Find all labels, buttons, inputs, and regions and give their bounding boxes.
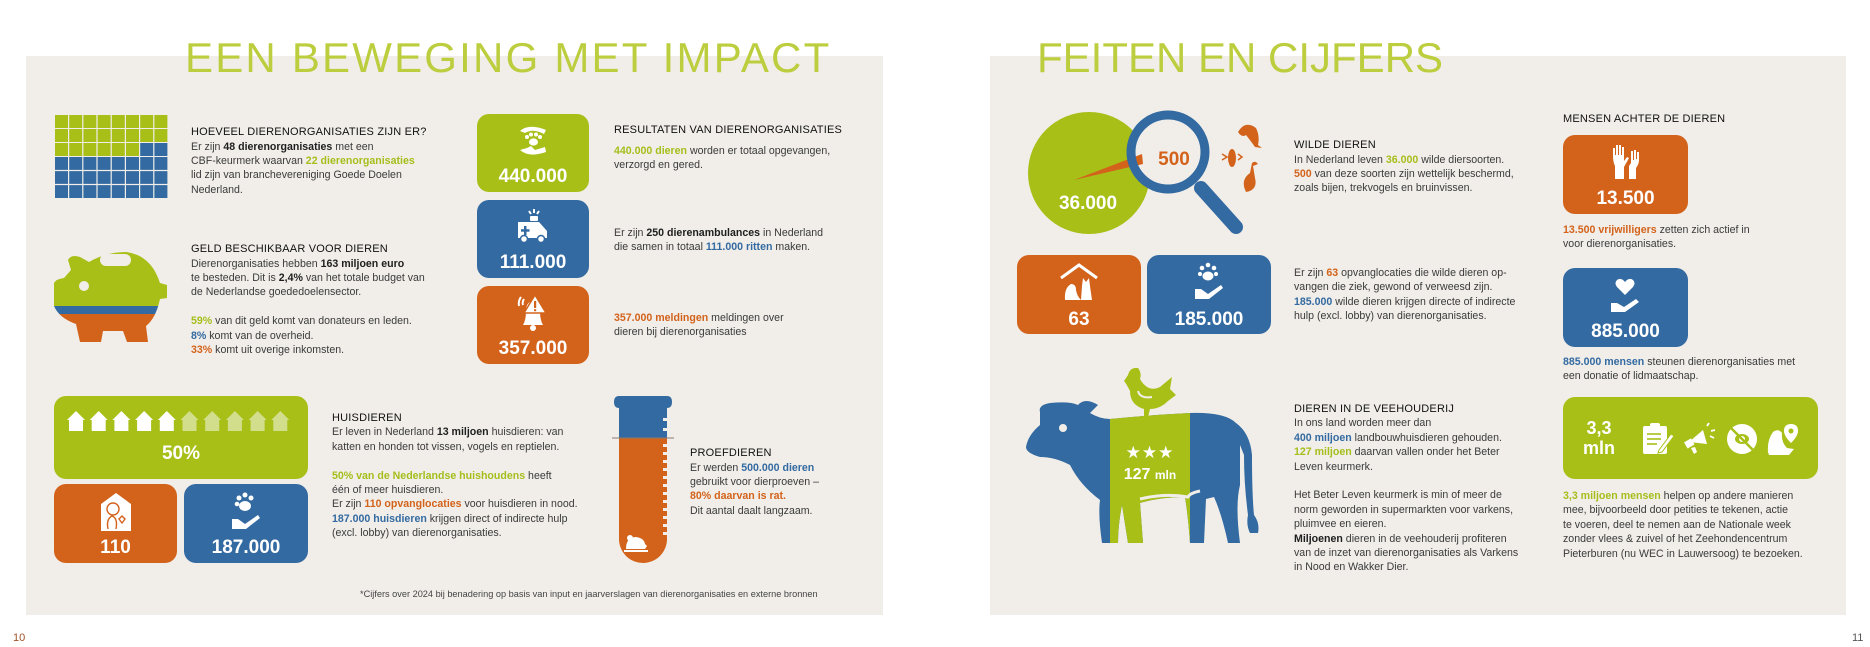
- box: 111.000 ambulances: 111.000: [500, 252, 566, 273]
- box: 3,3 mln mensen: [1563, 397, 1818, 479]
- box: 13.500 vrijwilligers: 13.500: [1596, 188, 1655, 209]
- text: In Nederland leven 36.000 wilde diersoorten.: [1294, 154, 1504, 166]
- text: lid zijn van branchevereniging Goede Doelen: [191, 169, 402, 181]
- box: 110 opvanglocaties: [54, 484, 177, 563]
- waffle chart: organisations: [55, 115, 168, 198]
- page number: 10: 10: [13, 632, 25, 644]
- text: 50% van de Nederlandse huishoudens heeft: [332, 470, 552, 482]
- text: opvang wilde dieren: vangen die ziek, gewond of verweesd zijn.: [1294, 281, 1492, 293]
- text: zoals bijen, trekvogels en bruinvissen.: [1294, 182, 1472, 194]
- number 3,3 mln: 3,3: [1586, 418, 1612, 438]
- text: 127 miljoen daarvan vallen onder het Beter: [1294, 446, 1500, 458]
- text: gebruikt voor dierproeven –: [690, 476, 819, 488]
- heading: mensen achter de dieren: MENSEN ACHTER DE DIEREN: [1563, 113, 1725, 125]
- icon: raised hands: [1613, 145, 1639, 179]
- text: 357.000 meldingen meldingen over: [614, 312, 784, 324]
- text: In ons land worden meer dan: [1294, 417, 1431, 429]
- box: 357.000 meldingen: [477, 286, 589, 364]
- box: 185.000 wilde dieren: 185.000: [1175, 309, 1243, 330]
- text: opvang wilde dieren: Er zijn 63 opvanglocaties die wilde dieren op-: [1294, 267, 1507, 279]
- text: proefdieren: [690, 447, 819, 517]
- text: PROEFDIEREN: [690, 447, 772, 459]
- text: donateurs: 885.000 mensen steunen dierenorganisaties met: [1563, 356, 1795, 368]
- text: te besteden. Dit is 2,4% van het totale budget van: [191, 272, 425, 284]
- text: dieren bij dierenorganisaties: [614, 326, 747, 338]
- icon: cow with chicken: [1026, 368, 1258, 543]
- chart: wild species magnifier: 500: [1158, 149, 1190, 170]
- text: van de inzet van dierenorganisaties als Varkens: [1294, 547, 1518, 559]
- icon: cow with chicken: 127 mln: [1124, 466, 1176, 483]
- icon: paw on hand: [1195, 262, 1223, 299]
- text: vrijwilligers: voor dierenorganisaties.: [1563, 238, 1676, 250]
- box: 63 opvanglocaties wild: [1017, 255, 1141, 334]
- box: 111.000 ambulances: [477, 200, 589, 278]
- orange wedge: [1074, 154, 1143, 180]
- box: 885.000 donateurs: [1563, 268, 1688, 347]
- box: 13.500 vrijwilligers: [1563, 135, 1688, 214]
- text: in Nood en Wakker Dier.: [1294, 561, 1408, 573]
- text: dieren in de veehouderij: [1294, 403, 1518, 573]
- text: één of meer huisdieren.: [332, 484, 443, 496]
- box: 185.000 wilde dieren: [1147, 255, 1271, 334]
- text: de Nederlandse goededoelensector.: [191, 286, 361, 298]
- icon: houses row: [67, 411, 290, 431]
- magnifier ring and handle: [1131, 115, 1205, 189]
- text: Er leven in Nederland 13 miljoen huisdieren: van: [332, 426, 563, 438]
- text: Leven keurmerk.: [1294, 461, 1373, 473]
- box: 187.000 huisdieren: [184, 484, 308, 563]
- text: Miljoenen dieren in de veehouderij profiteren: [1294, 533, 1507, 545]
- text: katten en honden tot vissen, vogels en reptielen.: [332, 441, 559, 453]
- text: CBF-keurmerk waarvan 22 dierenorganisaties: [191, 155, 415, 167]
- icon: test tube: [612, 396, 674, 563]
- icons: petition, megaphone, no egg, seal: [1643, 422, 1798, 455]
- number 3,3 mln: mln: [1583, 438, 1615, 458]
- text: huisdieren: [332, 412, 578, 539]
- text: opvang wilde dieren: [1294, 267, 1515, 322]
- icon: piggy bank: [54, 252, 167, 342]
- text: pluimvee en eieren.: [1294, 518, 1386, 530]
- box: 885.000 donateurs: 885.000: [1591, 321, 1660, 342]
- text: 440.000 dieren worden er totaal opgevangen,: [614, 145, 830, 157]
- text: GELD BESCHIKBAAR VOOR DIEREN: [191, 243, 388, 255]
- panel: left page: [26, 56, 883, 615]
- icon: shelter with seal and fox: [1060, 263, 1098, 300]
- icons: dolphin, bee, bird: [1222, 125, 1262, 192]
- text: Het Beter Leven keurmerk is min of meer de: [1294, 489, 1502, 501]
- text: vrijwilligers: 13.500 vrijwilligers zetten zich actief in: [1563, 224, 1750, 236]
- text: 3,3 miljoen mensen: te voeren, deel te nemen aan de Nationale week: [1563, 519, 1791, 531]
- icon: paw on hand: [232, 492, 260, 529]
- text: RESULTATEN VAN DIERENORGANISATIES: [614, 124, 842, 136]
- text: WILDE DIEREN: [1294, 139, 1376, 151]
- text: norm geworden in supermarkten voor varkens,: [1294, 504, 1513, 516]
- text: 3,3 miljoen mensen: Pieterburen (nu WEC in Lauwersoog) te bezoeken.: [1563, 548, 1803, 560]
- text: 187.000 huisdieren krijgen direct of indirecte hulp: [332, 513, 568, 525]
- title: left: EEN BEWEGING MET IMPACT: [185, 34, 831, 81]
- text: 400 miljoen landbouwhuisdieren gehouden.: [1294, 432, 1502, 444]
- text: 80% daarvan is rat.: [690, 490, 786, 502]
- box: 187.000 huisdieren: 187.000: [212, 537, 280, 558]
- text: Er werden 500.000 dieren: [690, 462, 814, 474]
- text: 3,3 miljoen mensen: 3,3 miljoen mensen helpen op andere manieren: [1563, 490, 1793, 502]
- text: 3,3 miljoen mensen: mee, bijvoorbeeld door petities te tekenen, actie: [1563, 504, 1788, 516]
- text: Dit aantal daalt langzaam.: [690, 505, 812, 517]
- text: DIEREN IN DE VEEHOUDERIJ: [1294, 403, 1454, 415]
- text: Er zijn 48 dierenorganisaties met een: [191, 140, 374, 152]
- text: Nederland.: [191, 184, 243, 196]
- text: donateurs: een donatie of lidmaatschap.: [1563, 370, 1698, 382]
- text: 3,3 miljoen mensen: [1563, 490, 1803, 560]
- title: right: FEITEN EN CIJFERS: [1037, 34, 1443, 81]
- text: opvang wilde dieren: hulp (excl. lobby) van dierenorganisaties.: [1294, 310, 1487, 322]
- text: vrijwilligers: [1563, 224, 1750, 250]
- icon: alarm bell: [518, 296, 545, 331]
- box: 110 opvanglocaties: 110: [100, 537, 131, 558]
- text: Er zijn 250 dierenambulances in Nederland: [614, 227, 823, 239]
- panel: right page: [990, 56, 1846, 615]
- text: geld beschikbaar: [191, 243, 425, 356]
- box: 50% huishoudens: [54, 396, 308, 479]
- number 3,3 mln: [1583, 418, 1615, 458]
- text: opvang wilde dieren: 185.000 wilde dieren krijgen directe of indirecte: [1294, 296, 1515, 308]
- box: 440.000 dieren: 440.000: [499, 166, 567, 187]
- text: hoeveel dierenorganisaties: [191, 126, 427, 196]
- page number: 11: 11: [1852, 632, 1863, 644]
- box: 357.000 meldingen: 357.000: [499, 338, 567, 359]
- text: (excl. lobby) van dierenorganisaties.: [332, 527, 502, 539]
- icon: mouse: [624, 535, 648, 552]
- icon: shelter with pets: [101, 493, 131, 531]
- chicken: [1124, 368, 1176, 417]
- text: 8% komt van de overheid.: [191, 330, 314, 342]
- text: 500 van deze soorten zijn wettelijk beschermd,: [1294, 168, 1514, 180]
- icon: ambulance: [518, 209, 547, 242]
- text: donateurs: [1563, 356, 1795, 382]
- box: 63 opvanglocaties wild: 63: [1068, 309, 1090, 330]
- footnote: *Cijfers over 2024 bij benadering op basis van input en jaarverslagen van dierenorganisaties en externe bronnen: [360, 589, 818, 599]
- green circle 36.000: [1028, 112, 1150, 234]
- lens: [1131, 115, 1205, 189]
- chart: wild species magnifier: [1028, 110, 1262, 234]
- icon: hands with paw: [520, 126, 546, 155]
- text: 59% van dit geld komt van donateurs en leden.: [191, 315, 412, 327]
- text: HOEVEEL DIERENORGANISATIES ZIJN ER?: [191, 126, 427, 138]
- text: verzorgd en gered.: [614, 159, 703, 171]
- box: 440.000 dieren: [477, 114, 589, 192]
- text: resultaten: [614, 124, 842, 338]
- text: wilde dieren: [1294, 139, 1514, 194]
- icon: heart on hand: [1611, 278, 1639, 312]
- box: 50% huishoudens: 50%: [162, 443, 200, 464]
- chart: wild species magnifier: 36.000: [1059, 193, 1117, 214]
- text: 33% komt uit overige inkomsten.: [191, 344, 344, 356]
- text: Dierenorganisaties hebben 163 miljoen euro: [191, 258, 404, 270]
- text: die samen in totaal 111.000 ritten maken.: [614, 241, 810, 253]
- text: 3,3 miljoen mensen: zonder vlees & zuivel of het Zeehondencentrum: [1563, 533, 1787, 545]
- text: HUISDIEREN: [332, 412, 402, 424]
- text: Er zijn 110 opvanglocaties voor huisdieren in nood.: [332, 498, 578, 510]
- stars and 127 mln: ★★★: [1126, 443, 1174, 463]
